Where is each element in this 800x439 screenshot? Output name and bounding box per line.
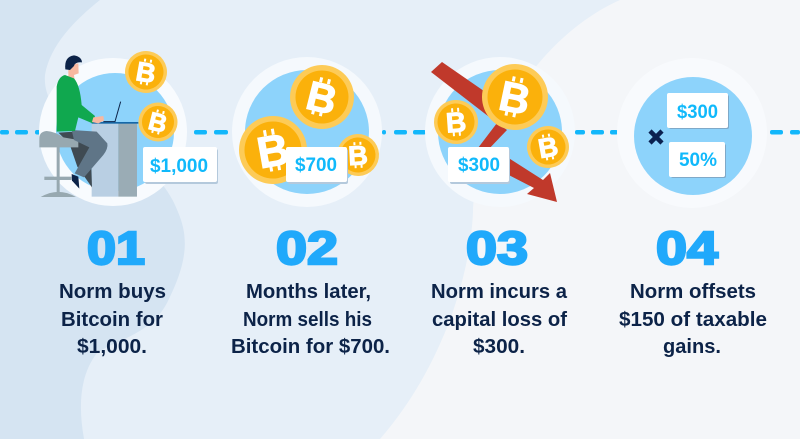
step 1 text: Bitcoin for — [61, 309, 163, 331]
panel: step 4 illustration — [617, 58, 767, 208]
coin — [134, 98, 182, 146]
step number 02: 02 — [276, 222, 338, 274]
step 2 text: Months later, — [246, 281, 371, 303]
coin — [283, 58, 361, 136]
step 1 text: Norm buys — [59, 281, 166, 303]
step 2 text — [231, 281, 390, 358]
step 4 text: $150 of taxable — [619, 309, 767, 331]
coin: B — [134, 56, 158, 89]
dashed timeline — [0, 130, 800, 134]
price label: $300 — [677, 102, 718, 123]
panel: step 3 illustration — [425, 57, 575, 207]
coin: B — [445, 106, 467, 139]
coin — [476, 58, 554, 136]
coin — [524, 123, 572, 171]
price label — [448, 147, 510, 184]
step 4 text: Norm offsets — [630, 281, 756, 303]
step 1 text: $1,000. — [77, 336, 147, 358]
step 2 text: Bitcoin for $700. — [231, 336, 390, 358]
coin — [336, 133, 380, 177]
panel: step 2 illustration — [232, 57, 382, 207]
falling arrow — [431, 62, 557, 202]
step 3 text: capital loss of — [432, 309, 567, 331]
coin: B — [348, 140, 369, 171]
coin — [234, 111, 312, 189]
percent label: 50% — [679, 150, 717, 171]
multiply icon — [650, 131, 662, 143]
coin: B — [495, 72, 535, 124]
step 4 text: gains. — [663, 336, 721, 358]
price label — [286, 147, 348, 184]
step 3 text: $300. — [473, 336, 525, 358]
step 2 text: Norm sells his — [243, 309, 372, 331]
price label — [667, 93, 729, 129]
step number 03: 03 — [466, 222, 528, 274]
person at desk — [39, 55, 138, 197]
price label — [143, 147, 218, 184]
coin: B — [253, 125, 293, 178]
coin — [122, 48, 170, 96]
coin: B — [302, 72, 342, 124]
step number 01: 01 — [87, 222, 145, 274]
step 3 text — [431, 281, 568, 358]
step 1 text — [59, 281, 166, 358]
coin — [433, 99, 479, 145]
price label: $700 — [295, 155, 337, 176]
coin: B — [146, 107, 170, 139]
price label: $1,000 — [150, 156, 208, 177]
price label: $300 — [458, 155, 500, 176]
step 3 text: Norm incurs a — [431, 281, 568, 303]
coin: B — [536, 131, 560, 164]
percent label — [669, 142, 726, 178]
step 4 text — [619, 281, 767, 358]
step number 04: 04 — [656, 222, 718, 274]
panel: step 1 illustration — [39, 48, 218, 206]
